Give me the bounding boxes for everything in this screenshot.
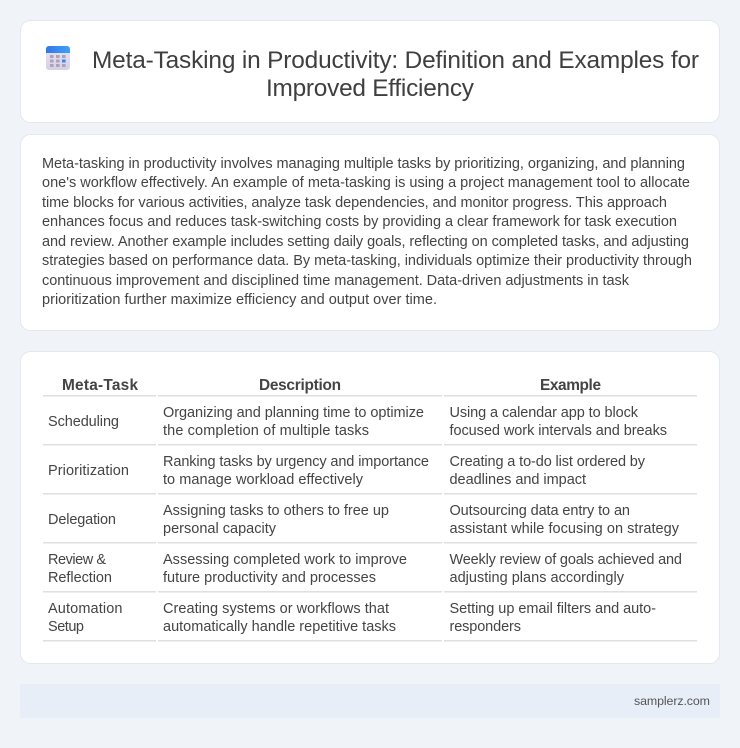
table row: prioritization: Ranking tasks by urgency and importance	[163, 454, 429, 470]
heading: Improved Efficiency	[266, 75, 475, 102]
table row: delegation: Delegation	[48, 512, 116, 528]
footer	[20, 684, 720, 718]
text block: introduction paragraph: and review. Another example includes setting daily goals, reflecting on completed tasks, and adjusting	[42, 234, 689, 250]
table row: prioritization: Creating a to-do list ordered by	[450, 454, 646, 470]
text block: introduction paragraph: prioritization further maximize efficiency and output over time.	[42, 292, 437, 308]
table row: delegation: Outsourcing data entry to an	[450, 503, 630, 519]
table header: Description	[259, 377, 341, 394]
table row: scheduling: Using a calendar app to block	[450, 405, 639, 421]
table row: review and reflection: Assessing completed work to improve	[163, 552, 407, 568]
table header: Meta-Task	[62, 377, 138, 394]
heading: Meta-Tasking in Productivity: Definition and Examples for	[92, 47, 699, 74]
text block: introduction paragraph: Meta-tasking in productivity involves managing multiple tasks by prioritizing, organizing, and planning	[42, 156, 685, 172]
table row: automation setup: Automation	[48, 601, 122, 617]
table row: automation setup: Setup	[48, 619, 84, 635]
table row: prioritization: to manage workload effectively	[163, 472, 364, 488]
text block: introduction paragraph: strategies based on performance data. By meta-tasking, individuals optimize their productivity through	[42, 253, 692, 269]
heading	[92, 47, 699, 102]
table row: prioritization	[43, 454, 697, 494]
table row: scheduling: Organizing and planning time to optimize	[163, 405, 424, 421]
table row: automation setup: Setting up email filters and auto-	[450, 601, 656, 617]
table row: delegation: Assigning tasks to others to free up	[163, 503, 389, 519]
table row: review and reflection: Review &	[48, 552, 106, 568]
table header: Example	[540, 377, 601, 394]
table row: review and reflection: adjusting plans accordingly	[450, 570, 625, 586]
table row: scheduling	[43, 405, 697, 446]
table row: delegation: personal capacity	[163, 521, 277, 537]
table row: automation setup	[43, 601, 697, 642]
text block: introduction paragraph: continuous improvement and disciplined time management. Data-driven adjustments in task	[42, 273, 630, 289]
table row: scheduling: Scheduling	[48, 414, 119, 430]
table header	[43, 377, 697, 396]
table row: prioritization: deadlines and impact	[450, 472, 586, 488]
table row: prioritization: Prioritization	[48, 463, 129, 479]
table row: review and reflection: Weekly review of goals achieved and	[450, 552, 682, 568]
icon: calendar	[46, 46, 70, 70]
text block: introduction paragraph: enhances focus and reduces task-switching costs by providing a clear framework for task execution	[42, 214, 677, 230]
table row: automation setup: responders	[450, 619, 521, 635]
panel: title	[20, 20, 720, 122]
panel: introduction text	[20, 134, 720, 330]
table row: review and reflection: Reflection	[48, 570, 112, 586]
table row: scheduling: the completion of multiple tasks	[163, 423, 369, 439]
text block: introduction paragraph: one's workflow effectively. An example of meta-tasking is using a project management tool to allocate	[42, 175, 690, 191]
table row: automation setup: automatically handle repetitive tasks	[163, 619, 396, 635]
table row: scheduling: focused work intervals and breaks	[450, 423, 667, 439]
text block: introduction paragraph: time blocks for various activities, analyze task dependencies, and monitor progress. This approach	[42, 195, 667, 211]
table row: delegation	[43, 503, 697, 544]
panel: meta-task table	[20, 352, 720, 664]
table row: delegation: assistant while focusing on strategy	[450, 521, 680, 537]
footer: samplerz.com	[634, 694, 710, 708]
table row: automation setup: Creating systems or workflows that	[163, 601, 389, 617]
table row: review and reflection	[43, 552, 697, 592]
table row: review and reflection: future productivity and processes	[163, 570, 376, 586]
text block: introduction paragraph	[42, 156, 692, 308]
